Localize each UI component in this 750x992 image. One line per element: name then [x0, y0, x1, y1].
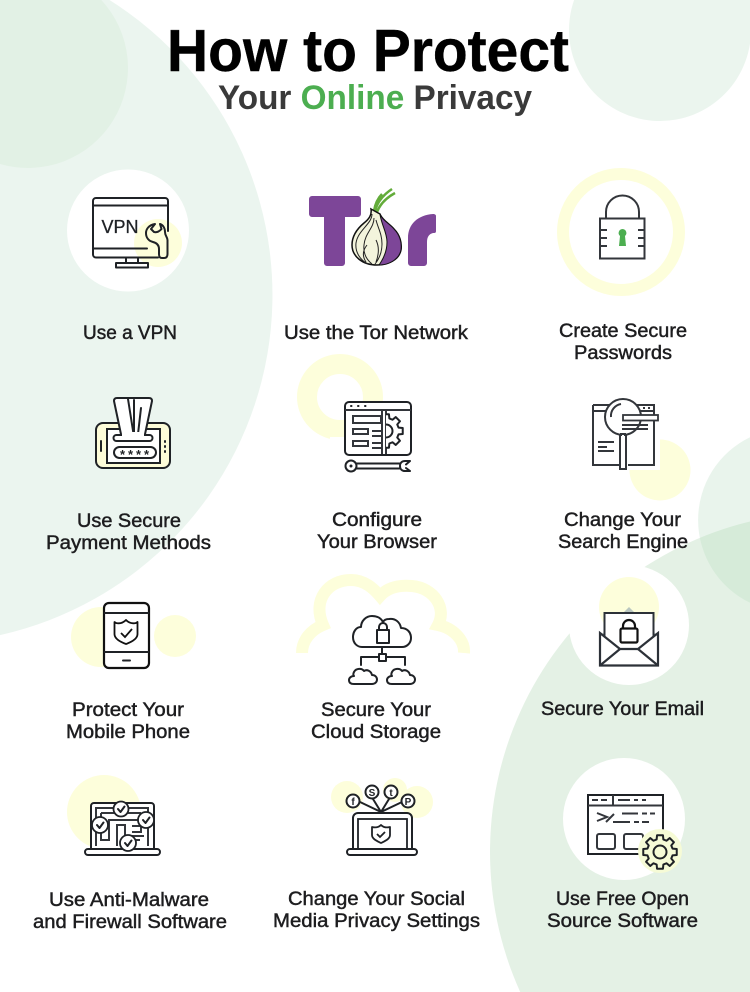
label line 2: Media Privacy Settings — [273, 911, 480, 932]
label: Use a VPN — [83, 323, 177, 344]
label: Use Secure — [77, 511, 181, 532]
icon: payment phone with cards: **** — [120, 447, 150, 462]
label line 2: Your Browser — [317, 532, 438, 553]
icon: Tor logo — [309, 189, 436, 266]
label: Use Anti-Malware — [49, 890, 209, 911]
title: How to Protect — [167, 18, 569, 84]
label: Use the Tor Network — [284, 323, 469, 344]
panel: change your search engine — [558, 399, 690, 553]
icon: payment phone with cards — [96, 398, 170, 468]
panel: secure your cloud storage — [302, 580, 464, 743]
label: Protect Your — [72, 700, 185, 721]
panel: use anti-malware and firewall software — [33, 775, 227, 933]
subtitle: Your Online Privacy — [218, 79, 532, 117]
panel: change your social media privacy settings — [273, 778, 480, 932]
label line 2: Cloud Storage — [311, 722, 441, 743]
icon: monitor with wrench — [67, 170, 189, 292]
panel: protect your mobile phone — [66, 603, 196, 743]
icon: laptop with social bubbles: t — [389, 788, 393, 799]
title — [167, 18, 569, 117]
icon: laptop with social bubbles: P — [405, 797, 412, 808]
icon: laptop with check bubbles — [67, 775, 160, 855]
icon: laptop with social bubbles: S — [369, 788, 376, 799]
label: Secure Your — [321, 700, 432, 721]
panel: secure your email — [541, 565, 704, 720]
panel: use secure payment methods — [46, 398, 211, 554]
panel: configure your browser — [307, 364, 438, 553]
panel: use free open source software — [547, 758, 698, 932]
panel: use the Tor network — [284, 189, 469, 344]
icon: browser window with gear — [307, 364, 411, 472]
icon: phone with shield — [71, 603, 196, 668]
label line 2: Source Software — [547, 911, 698, 932]
panel: create secure passwords — [559, 174, 687, 364]
label: Use Free Open — [556, 889, 689, 910]
label: Configure — [332, 510, 422, 531]
icon: cloud network with lock — [302, 580, 464, 684]
label: Secure Your Email — [541, 699, 704, 720]
icon: document with magnifier — [593, 399, 690, 500]
icon: code window with gear — [563, 758, 685, 880]
icon: envelope with lock — [569, 565, 689, 685]
label: Change Your — [564, 510, 682, 531]
label line 2: Passwords — [574, 343, 672, 364]
label line 2: Payment Methods — [46, 533, 211, 554]
label line 2: Mobile Phone — [66, 722, 190, 743]
icon: laptop with social bubbles: f — [351, 797, 355, 808]
panel: use a VPN — [67, 170, 189, 344]
icon: laptop with social bubbles — [331, 778, 433, 855]
label: Change Your Social — [288, 889, 465, 910]
icon: monitor with wrench: VPN — [102, 217, 139, 237]
icon: padlock in ring — [563, 174, 679, 290]
label line 2: Search Engine — [558, 532, 688, 553]
label: Create Secure — [559, 321, 687, 342]
label line 2: and Firewall Software — [33, 912, 227, 933]
